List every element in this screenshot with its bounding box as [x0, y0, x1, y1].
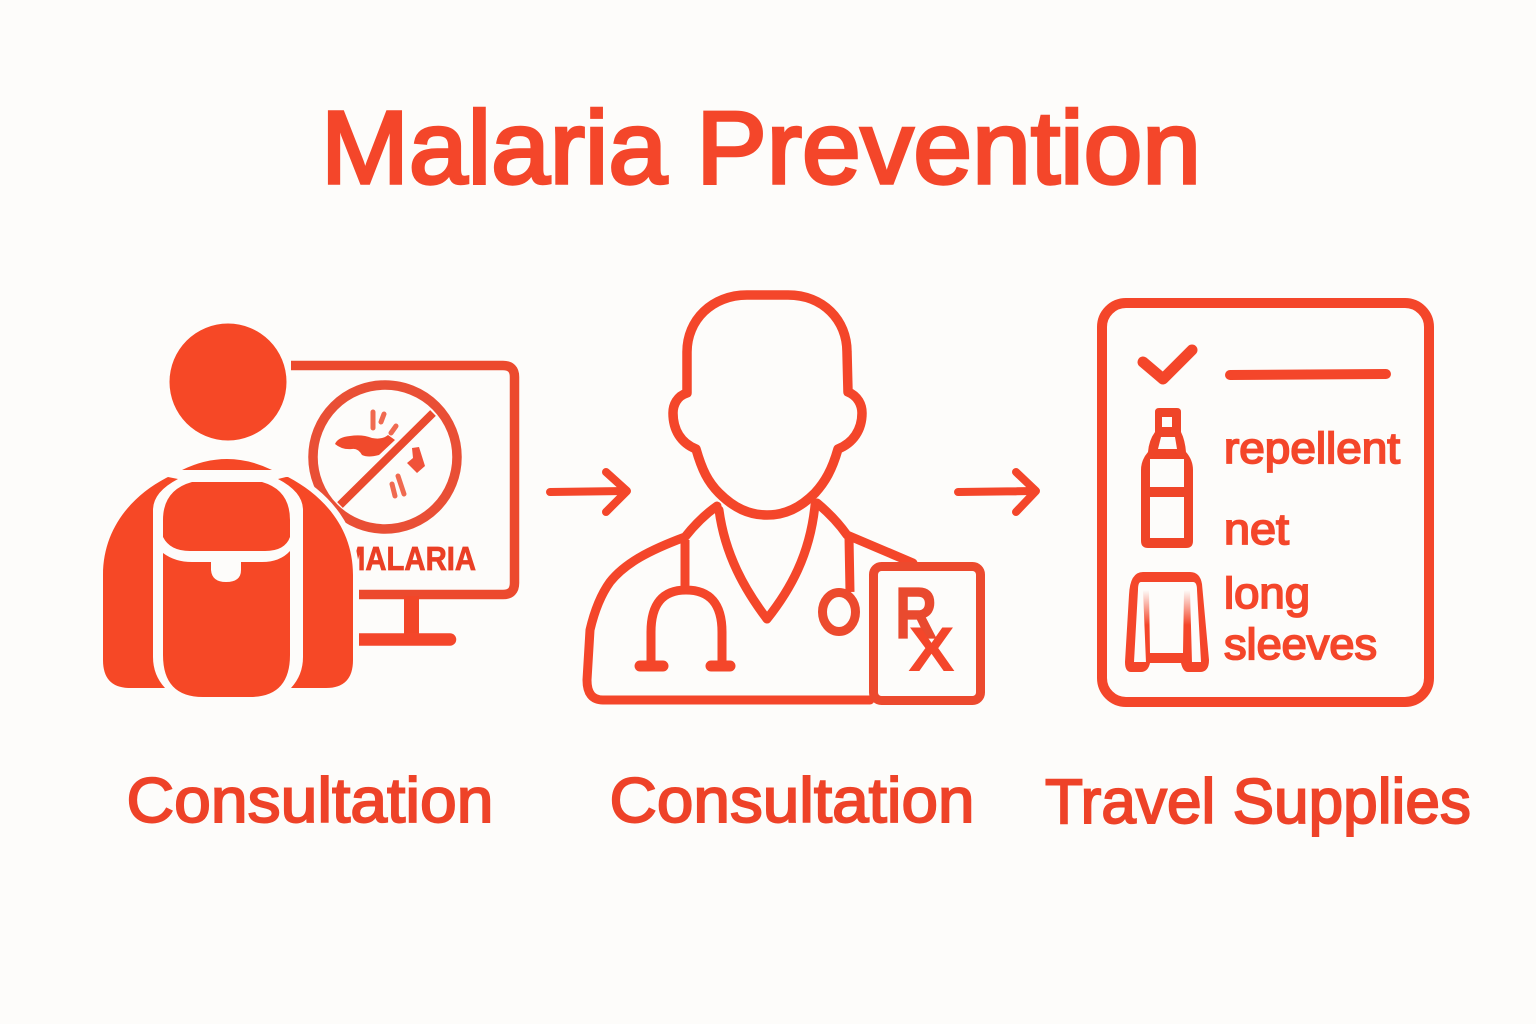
- label: sleeves: sleeves: [1224, 620, 1377, 669]
- label: repellent: repellent: [1224, 424, 1400, 473]
- panel: traveler with malaria screen: [103, 324, 514, 697]
- caption: second consultation: Consultation: [610, 766, 974, 836]
- label: long: long: [1224, 569, 1310, 618]
- icon: stethoscope: [640, 537, 856, 666]
- icon: shoulders and backpack: [103, 459, 353, 697]
- icon: repellent bottle: [1141, 408, 1193, 548]
- icon: no-mosquito sign: [313, 385, 457, 529]
- title: Malaria Prevention: [321, 90, 1201, 205]
- icon: doctor coat: [587, 503, 913, 700]
- panel: travel supplies checklist: [1102, 303, 1429, 702]
- Rx symbol tail: X: [908, 615, 955, 685]
- caption: first consultation: Consultation: [126, 766, 493, 836]
- panel: doctor consultation: [587, 295, 980, 700]
- arrow: step one to step two: [550, 472, 627, 512]
- checklist frame: [1102, 303, 1429, 702]
- prescription pad: [874, 566, 980, 700]
- icon: doctor head: [673, 295, 862, 515]
- icon: monitor: [291, 366, 514, 640]
- blank checklist line: [1230, 374, 1386, 375]
- icon: coat collar: [719, 505, 815, 619]
- caption: travel supplies: Travel Supplies: [1045, 767, 1471, 837]
- icon: person head: [170, 324, 286, 440]
- icon: check mark: [1143, 350, 1192, 379]
- Rx symbol: R: [895, 574, 937, 654]
- arrow: step two to step three: [958, 472, 1036, 512]
- icon: long-sleeved garment: [1125, 572, 1209, 672]
- label: net: net: [1224, 505, 1289, 554]
- screen label: MALARIA: MALARIA: [341, 540, 476, 577]
